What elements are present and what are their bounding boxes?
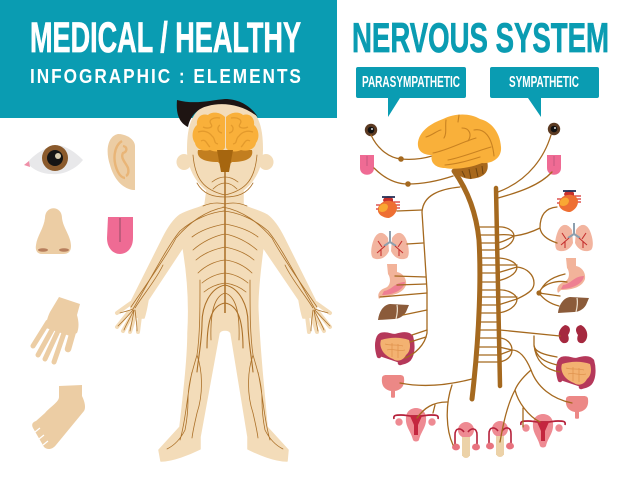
icon: ear xyxy=(108,134,135,190)
icon: intestine left xyxy=(377,334,412,363)
organs: parasympathetic side xyxy=(360,124,480,458)
icon: stomach left xyxy=(378,264,406,299)
callout: sympathetic: SYMPATHETIC xyxy=(509,74,579,91)
nerve diagram xyxy=(371,114,572,445)
spinal cord: parasympathetic xyxy=(454,171,480,399)
brain xyxy=(193,113,258,172)
icon: male organ right xyxy=(486,421,514,457)
icon: eye xyxy=(24,145,83,174)
spinal cord: sympathetic xyxy=(496,188,500,386)
icon: kidneys xyxy=(559,325,587,343)
figure: body with nervous system xyxy=(117,99,330,461)
icon: tongue xyxy=(107,217,133,254)
body silhouette xyxy=(117,101,330,461)
ladder rungs xyxy=(476,227,499,362)
icon: bladder right xyxy=(566,396,588,419)
icon: hand xyxy=(33,297,80,362)
title: medical healthy: MEDICAL / HEALTHY xyxy=(30,14,301,62)
icon: male organ left xyxy=(452,422,480,458)
icon: stomach right xyxy=(557,258,585,293)
icon: uterus left xyxy=(394,408,438,442)
ganglion nodes xyxy=(398,156,542,296)
connecting nerves xyxy=(371,135,572,445)
hair xyxy=(177,99,258,127)
callout: parasympathetic: PARASYMPATHETIC xyxy=(362,74,460,91)
callout: parasympathetic xyxy=(356,67,466,117)
icon: intestine right xyxy=(558,358,593,387)
subtitle: INFOGRAPHIC : ELEMENTS xyxy=(30,65,301,87)
icon: lungs right xyxy=(555,223,593,251)
icon: small tongue left xyxy=(360,155,374,175)
callout: sympathetic xyxy=(490,67,599,117)
icon: foot xyxy=(32,385,85,449)
icon: heart left xyxy=(376,196,400,218)
cerebellum xyxy=(453,161,488,179)
icon: small eye left xyxy=(365,124,377,136)
icon: nose xyxy=(36,208,71,254)
icon: bladder left xyxy=(382,375,404,398)
organs: sympathetic side xyxy=(486,123,593,457)
icon: uterus right xyxy=(521,414,565,448)
icon: liver left xyxy=(378,304,409,320)
icon: liver right xyxy=(558,297,589,313)
brain side view xyxy=(418,114,501,169)
header banner xyxy=(0,0,337,118)
icon: heart right xyxy=(557,190,581,212)
nerves xyxy=(118,155,330,449)
icon: small eye right xyxy=(548,123,560,135)
icon: small tongue right xyxy=(547,155,561,175)
icon: lungs left xyxy=(371,231,409,259)
